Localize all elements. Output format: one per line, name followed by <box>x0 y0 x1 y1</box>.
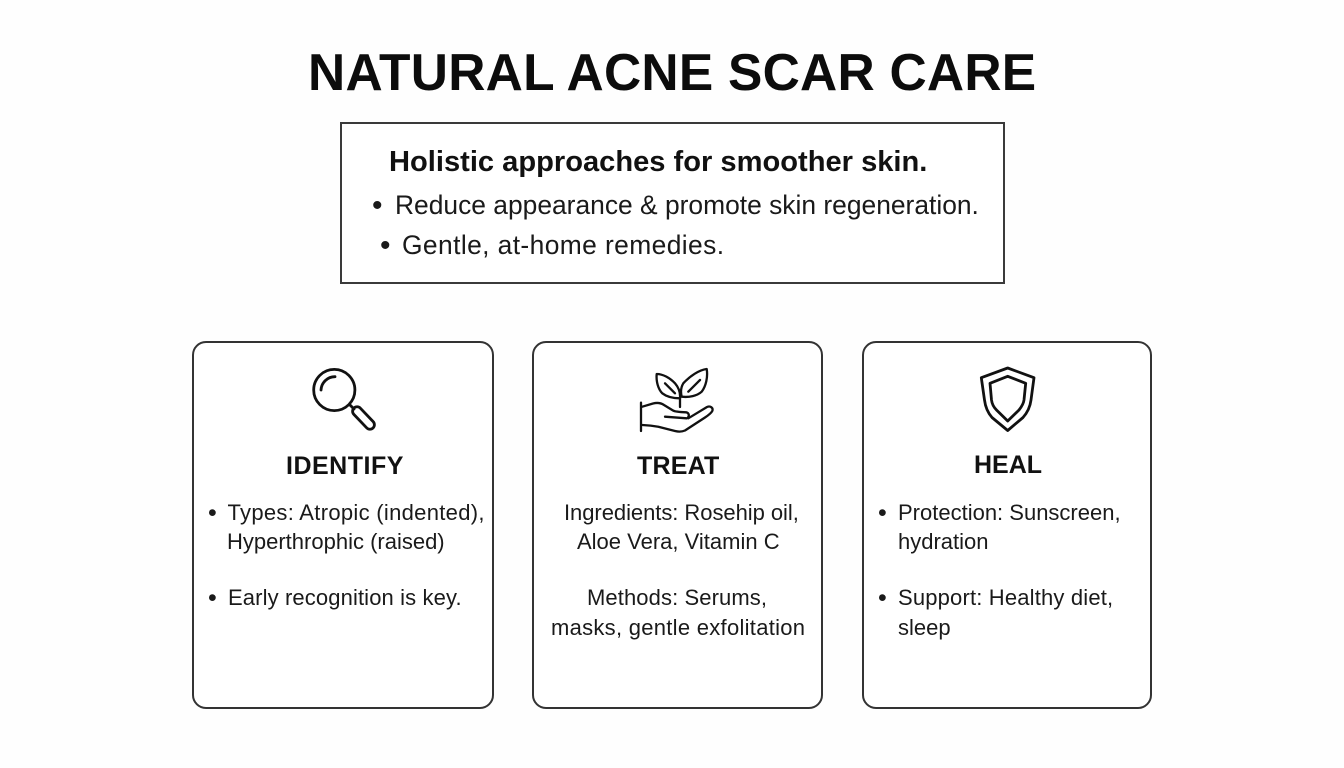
heading: treat: TREAT <box>637 452 719 480</box>
panel: identify <box>192 341 494 709</box>
intro bullet 2: • <box>380 229 391 262</box>
treat methods line 2: masks, gentle exfolitation <box>551 615 805 640</box>
heal bullet 1: Protection: Sunscreen, <box>898 500 1121 525</box>
panel: heal <box>862 341 1152 709</box>
intro bullet 1: Reduce appearance & promote skin regeneration. <box>395 190 979 220</box>
heal bullet 2: • <box>878 584 887 612</box>
treat methods line 1: Methods: Serums, <box>587 585 767 610</box>
heal bullet 1: • <box>878 499 887 527</box>
heading: heal: HEAL <box>974 451 1042 479</box>
panel: treat <box>532 341 823 709</box>
heading: identify: IDENTIFY <box>286 452 404 480</box>
heal bullet 2: Support: Healthy diet, <box>898 585 1113 610</box>
intro bullet 2: Gentle, at-home remedies. <box>402 230 724 260</box>
heal bullet 1 continuation: hydration <box>898 529 989 554</box>
icon: magnifying glass <box>312 368 376 431</box>
identify bullet 1 continuation: Hyperthrophic (raised) <box>227 529 445 554</box>
icon: hand holding plant <box>640 368 714 433</box>
treat ingredients line 1: Ingredients: Rosehip oil, <box>564 500 799 525</box>
treat ingredients line 2: Aloe Vera, Vitamin C <box>577 529 780 554</box>
title: NATURAL ACNE SCAR CARE <box>308 43 1036 101</box>
intro heading: Holistic approaches for smoother skin. <box>389 146 927 178</box>
intro bullet 1: • <box>372 189 383 222</box>
panel: intro box <box>340 122 1005 284</box>
identify bullet 2: Early recognition is key. <box>228 585 462 610</box>
icon: shield <box>980 366 1036 432</box>
identify bullet 2: • <box>208 584 217 612</box>
heal bullet 2 continuation: sleep <box>898 615 951 640</box>
identify bullet 1: • <box>208 499 217 527</box>
identify bullet 1: Types: Atropic (indented), <box>228 500 485 525</box>
